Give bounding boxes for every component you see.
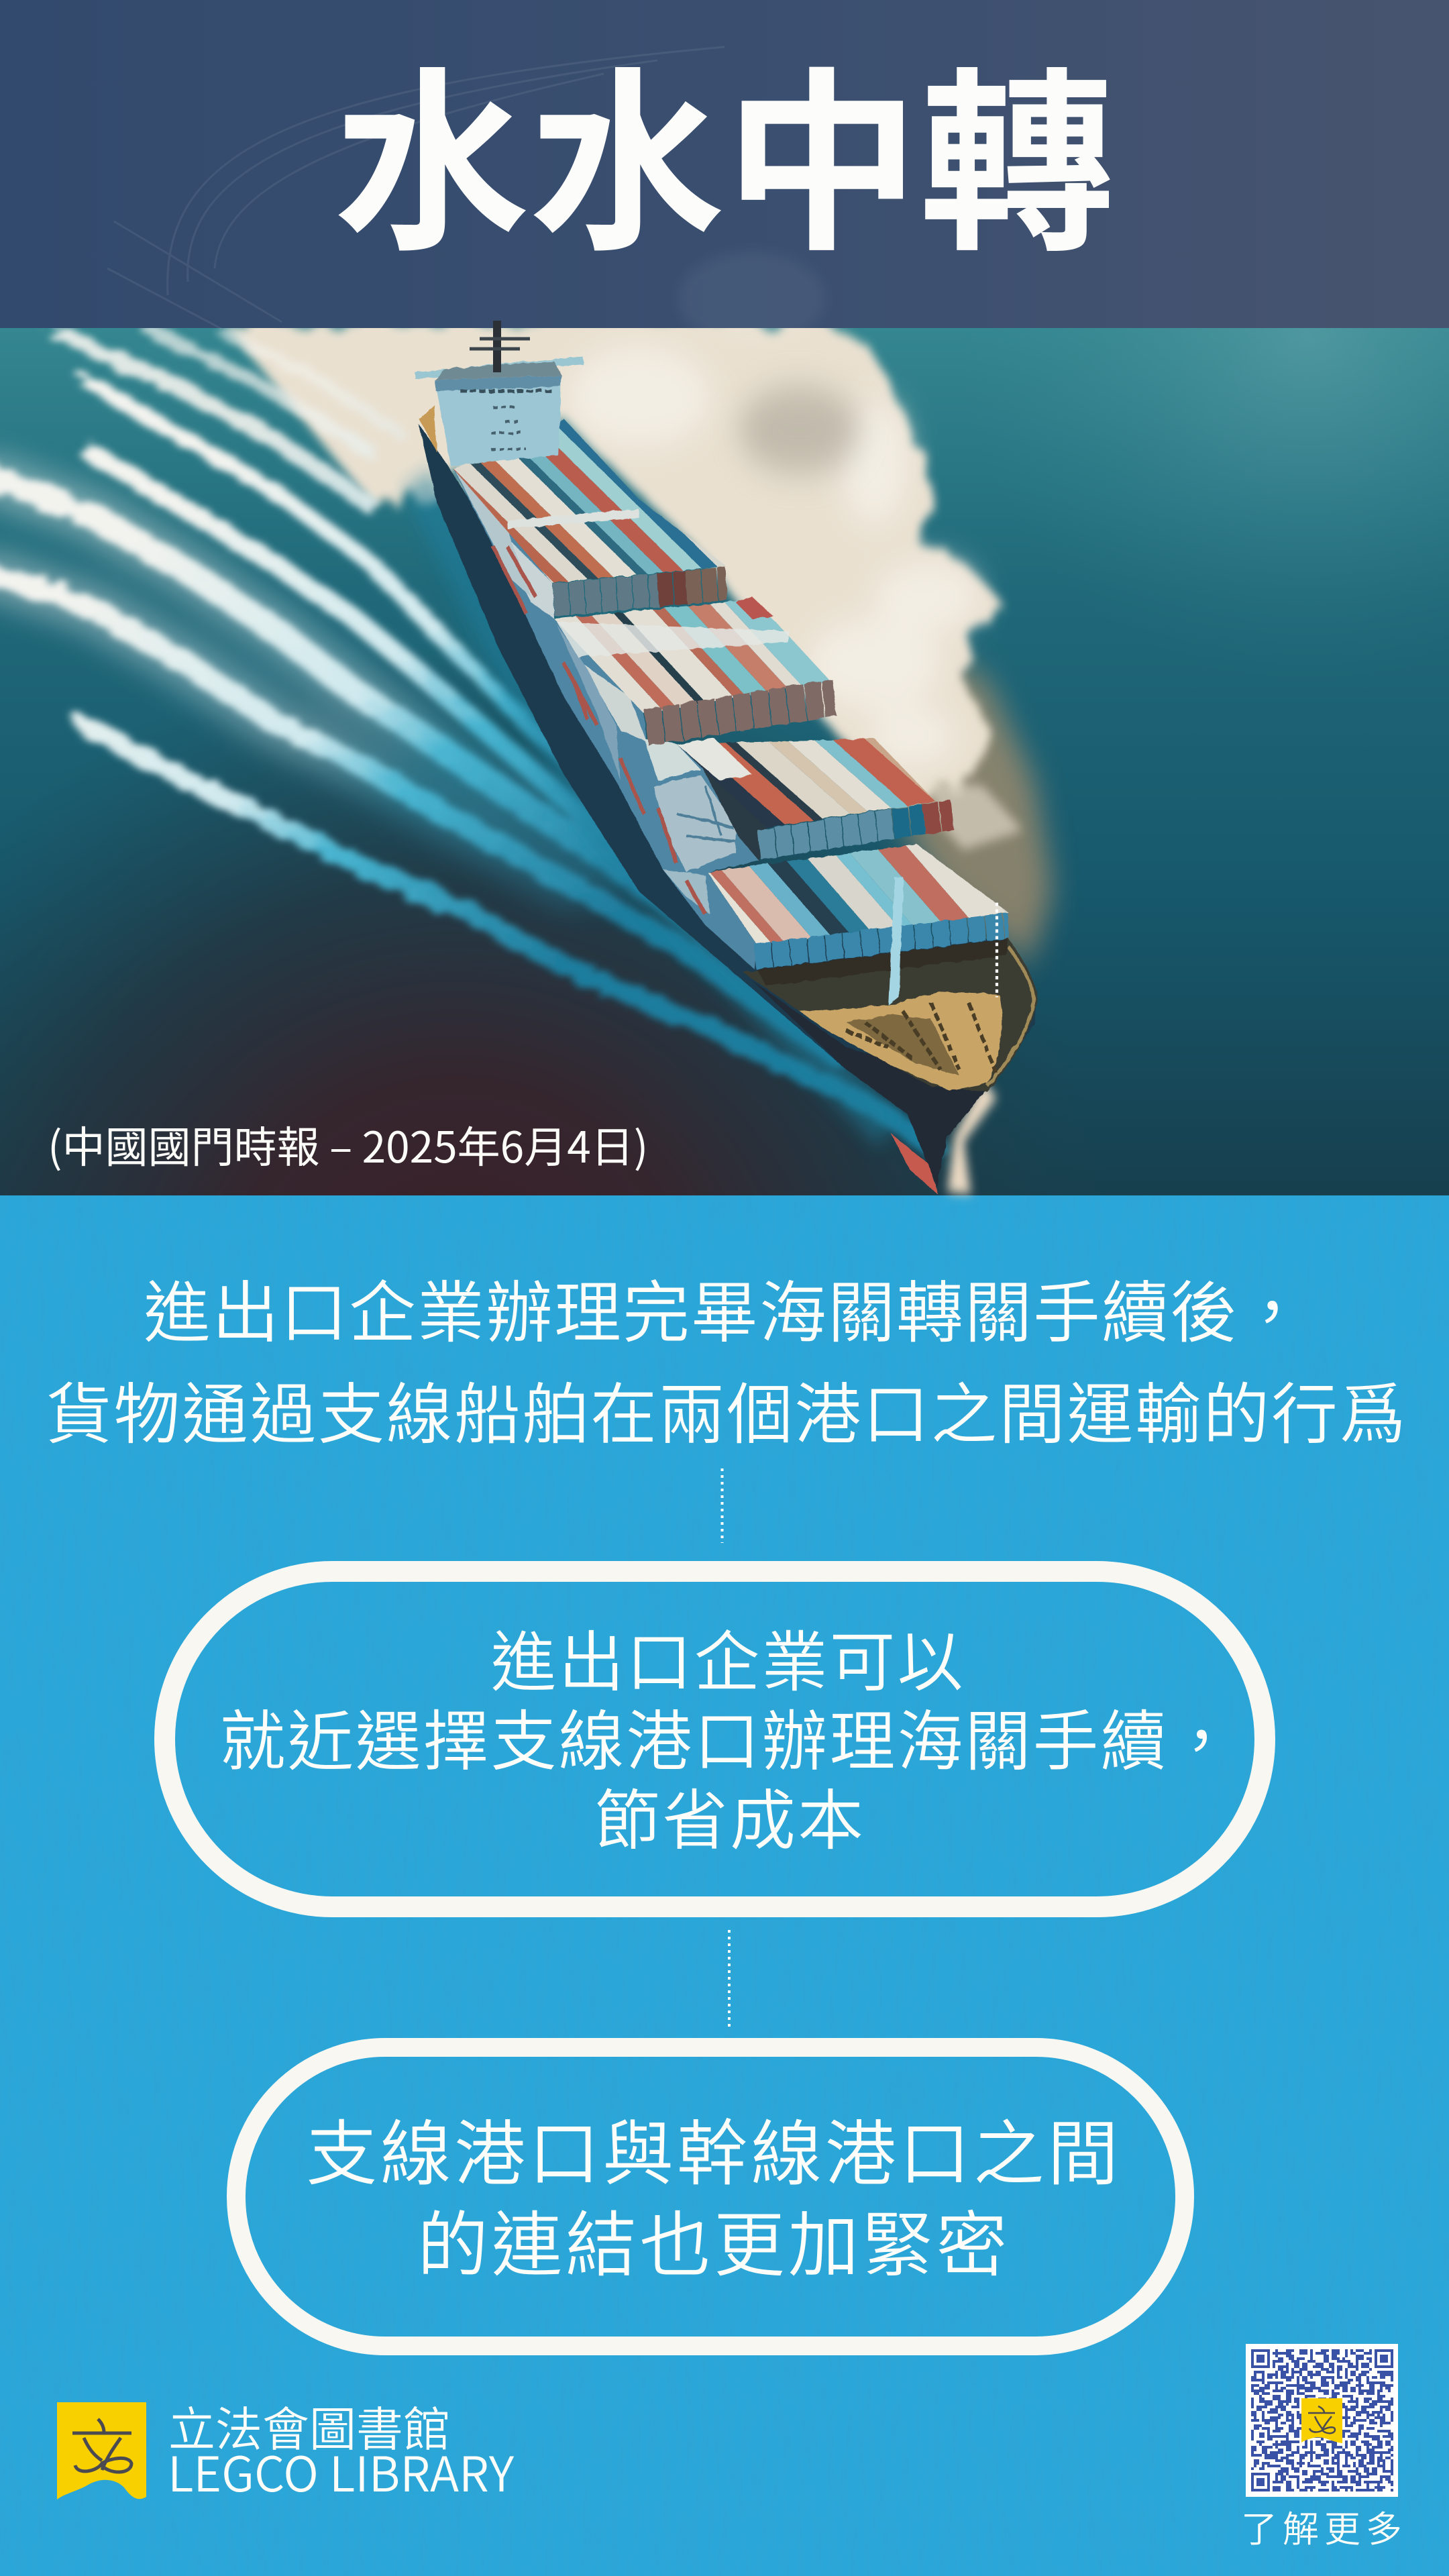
dotted connector 2 [728, 1930, 731, 2029]
superstructure [435, 376, 561, 466]
learn more label: 了解更多 [1241, 2500, 1407, 2553]
pill: feeder and hub port link [236, 2047, 1185, 2346]
smoke cloud [221, 319, 1053, 964]
intro text: 貨物通過支線船舶在兩個港口之間運輸的行爲 [46, 1360, 1407, 1457]
deck at bow [743, 938, 1037, 1091]
container block D [708, 844, 1009, 943]
container block A [453, 419, 726, 583]
wake trails [0, 331, 933, 1148]
water rush along hull [418, 480, 889, 1130]
dotted connector 1 [720, 1468, 723, 1543]
pill: feeder and hub port link: 的連結也更加緊密 [417, 2188, 1010, 2291]
icon: yellow ribbon emblem [57, 2402, 146, 2500]
front face A [553, 584, 727, 600]
ship [381, 357, 1037, 1195]
paper texture overlay [0, 1195, 1449, 2576]
page background: blue paper [0, 1194, 1449, 2576]
front face C [759, 815, 952, 845]
LegCo Library logo: LEGCO LIBRARY [168, 2436, 515, 2506]
library name: 立法會圖書館 [168, 2392, 450, 2460]
pill: benefit for importers and exporters [165, 1571, 1265, 1907]
container side stack [453, 469, 766, 969]
pill: benefit for importers and exporters: 進出口企業可以 [490, 1609, 965, 1705]
bow foam [947, 1081, 997, 1195]
intro text [46, 1258, 1407, 1457]
title: 水水中轉 [334, 6, 1115, 289]
QR code [1246, 2344, 1398, 2497]
front face D [755, 926, 1009, 957]
dotted marker on deck [995, 903, 999, 998]
pill: benefit for importers and exporters: 節省成本 [594, 1768, 865, 1863]
pill: benefit for importers and exporters: 就近選擇支線港口辦理海關手續， [219, 1688, 1236, 1784]
container block B [554, 600, 829, 713]
hull [419, 425, 1037, 1186]
crane mast [889, 877, 904, 1006]
intro text: 進出口企業辦理完畢海關轉關手續後， [144, 1258, 1307, 1356]
icon: QR centre emblem [1301, 2398, 1342, 2443]
ship mast rising over banner [470, 321, 530, 372]
pill: feeder and hub port link: 支線港口與幹線港口之間 [306, 2096, 1122, 2200]
LegCo Library logo [57, 2392, 515, 2506]
front face B [646, 698, 835, 727]
photo: container ship at sea [0, 319, 1449, 1195]
photo caption: (中國國門時報 – 2025年6月4日) [48, 1114, 648, 1175]
container block C [677, 738, 935, 828]
title banner [0, 0, 1449, 345]
